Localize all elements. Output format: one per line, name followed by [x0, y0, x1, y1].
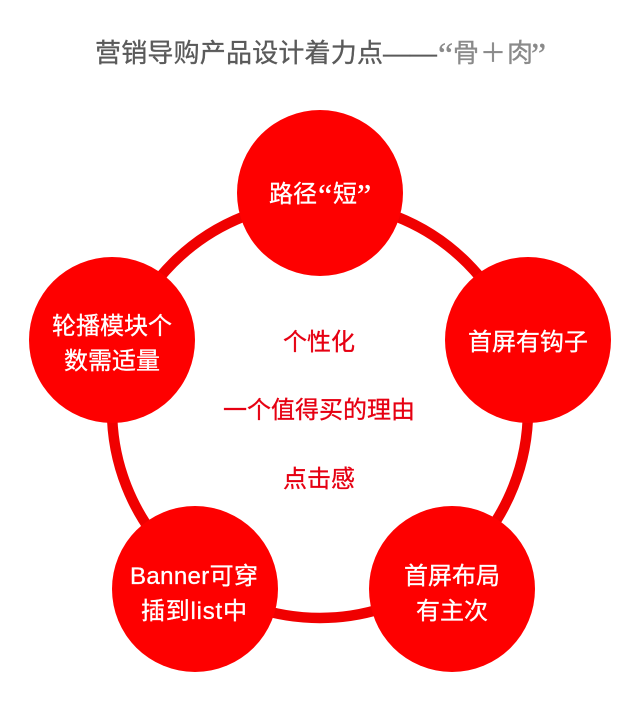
ring connecting the five nodes	[112, 202, 528, 618]
node: left: 轮播模块个	[52, 313, 172, 340]
node: right: 首屏有钩子	[468, 329, 588, 356]
node: bottom left	[112, 506, 278, 672]
node: bottom right	[369, 506, 535, 672]
node: top: “	[318, 177, 332, 213]
title: 骨	[453, 38, 479, 68]
node: bottom right: 首屏布局	[404, 563, 500, 590]
node: right	[445, 257, 611, 423]
title: 营销导购产品设计着力点	[95, 38, 383, 68]
center text	[223, 329, 415, 493]
center text: 个性化	[283, 329, 355, 356]
node: bottom left: 插到list中	[141, 598, 247, 625]
title: ——	[383, 38, 437, 68]
node: bottom left: Banner可穿	[130, 563, 258, 590]
node: top	[237, 110, 403, 276]
node: top: 短	[333, 181, 357, 208]
center text: 一个值得买的理由	[223, 397, 415, 424]
center text: 点击感	[283, 466, 355, 493]
title: 肉	[507, 38, 533, 68]
node: top: 路径	[269, 181, 317, 208]
node: left: 数需适量	[64, 348, 160, 375]
title	[95, 37, 546, 74]
node: bottom right: 有主次	[416, 598, 488, 625]
title: ”	[531, 37, 546, 74]
node: left	[29, 257, 195, 423]
title: “	[438, 37, 453, 74]
node: top: ”	[357, 177, 371, 213]
title: ＋	[480, 38, 506, 68]
